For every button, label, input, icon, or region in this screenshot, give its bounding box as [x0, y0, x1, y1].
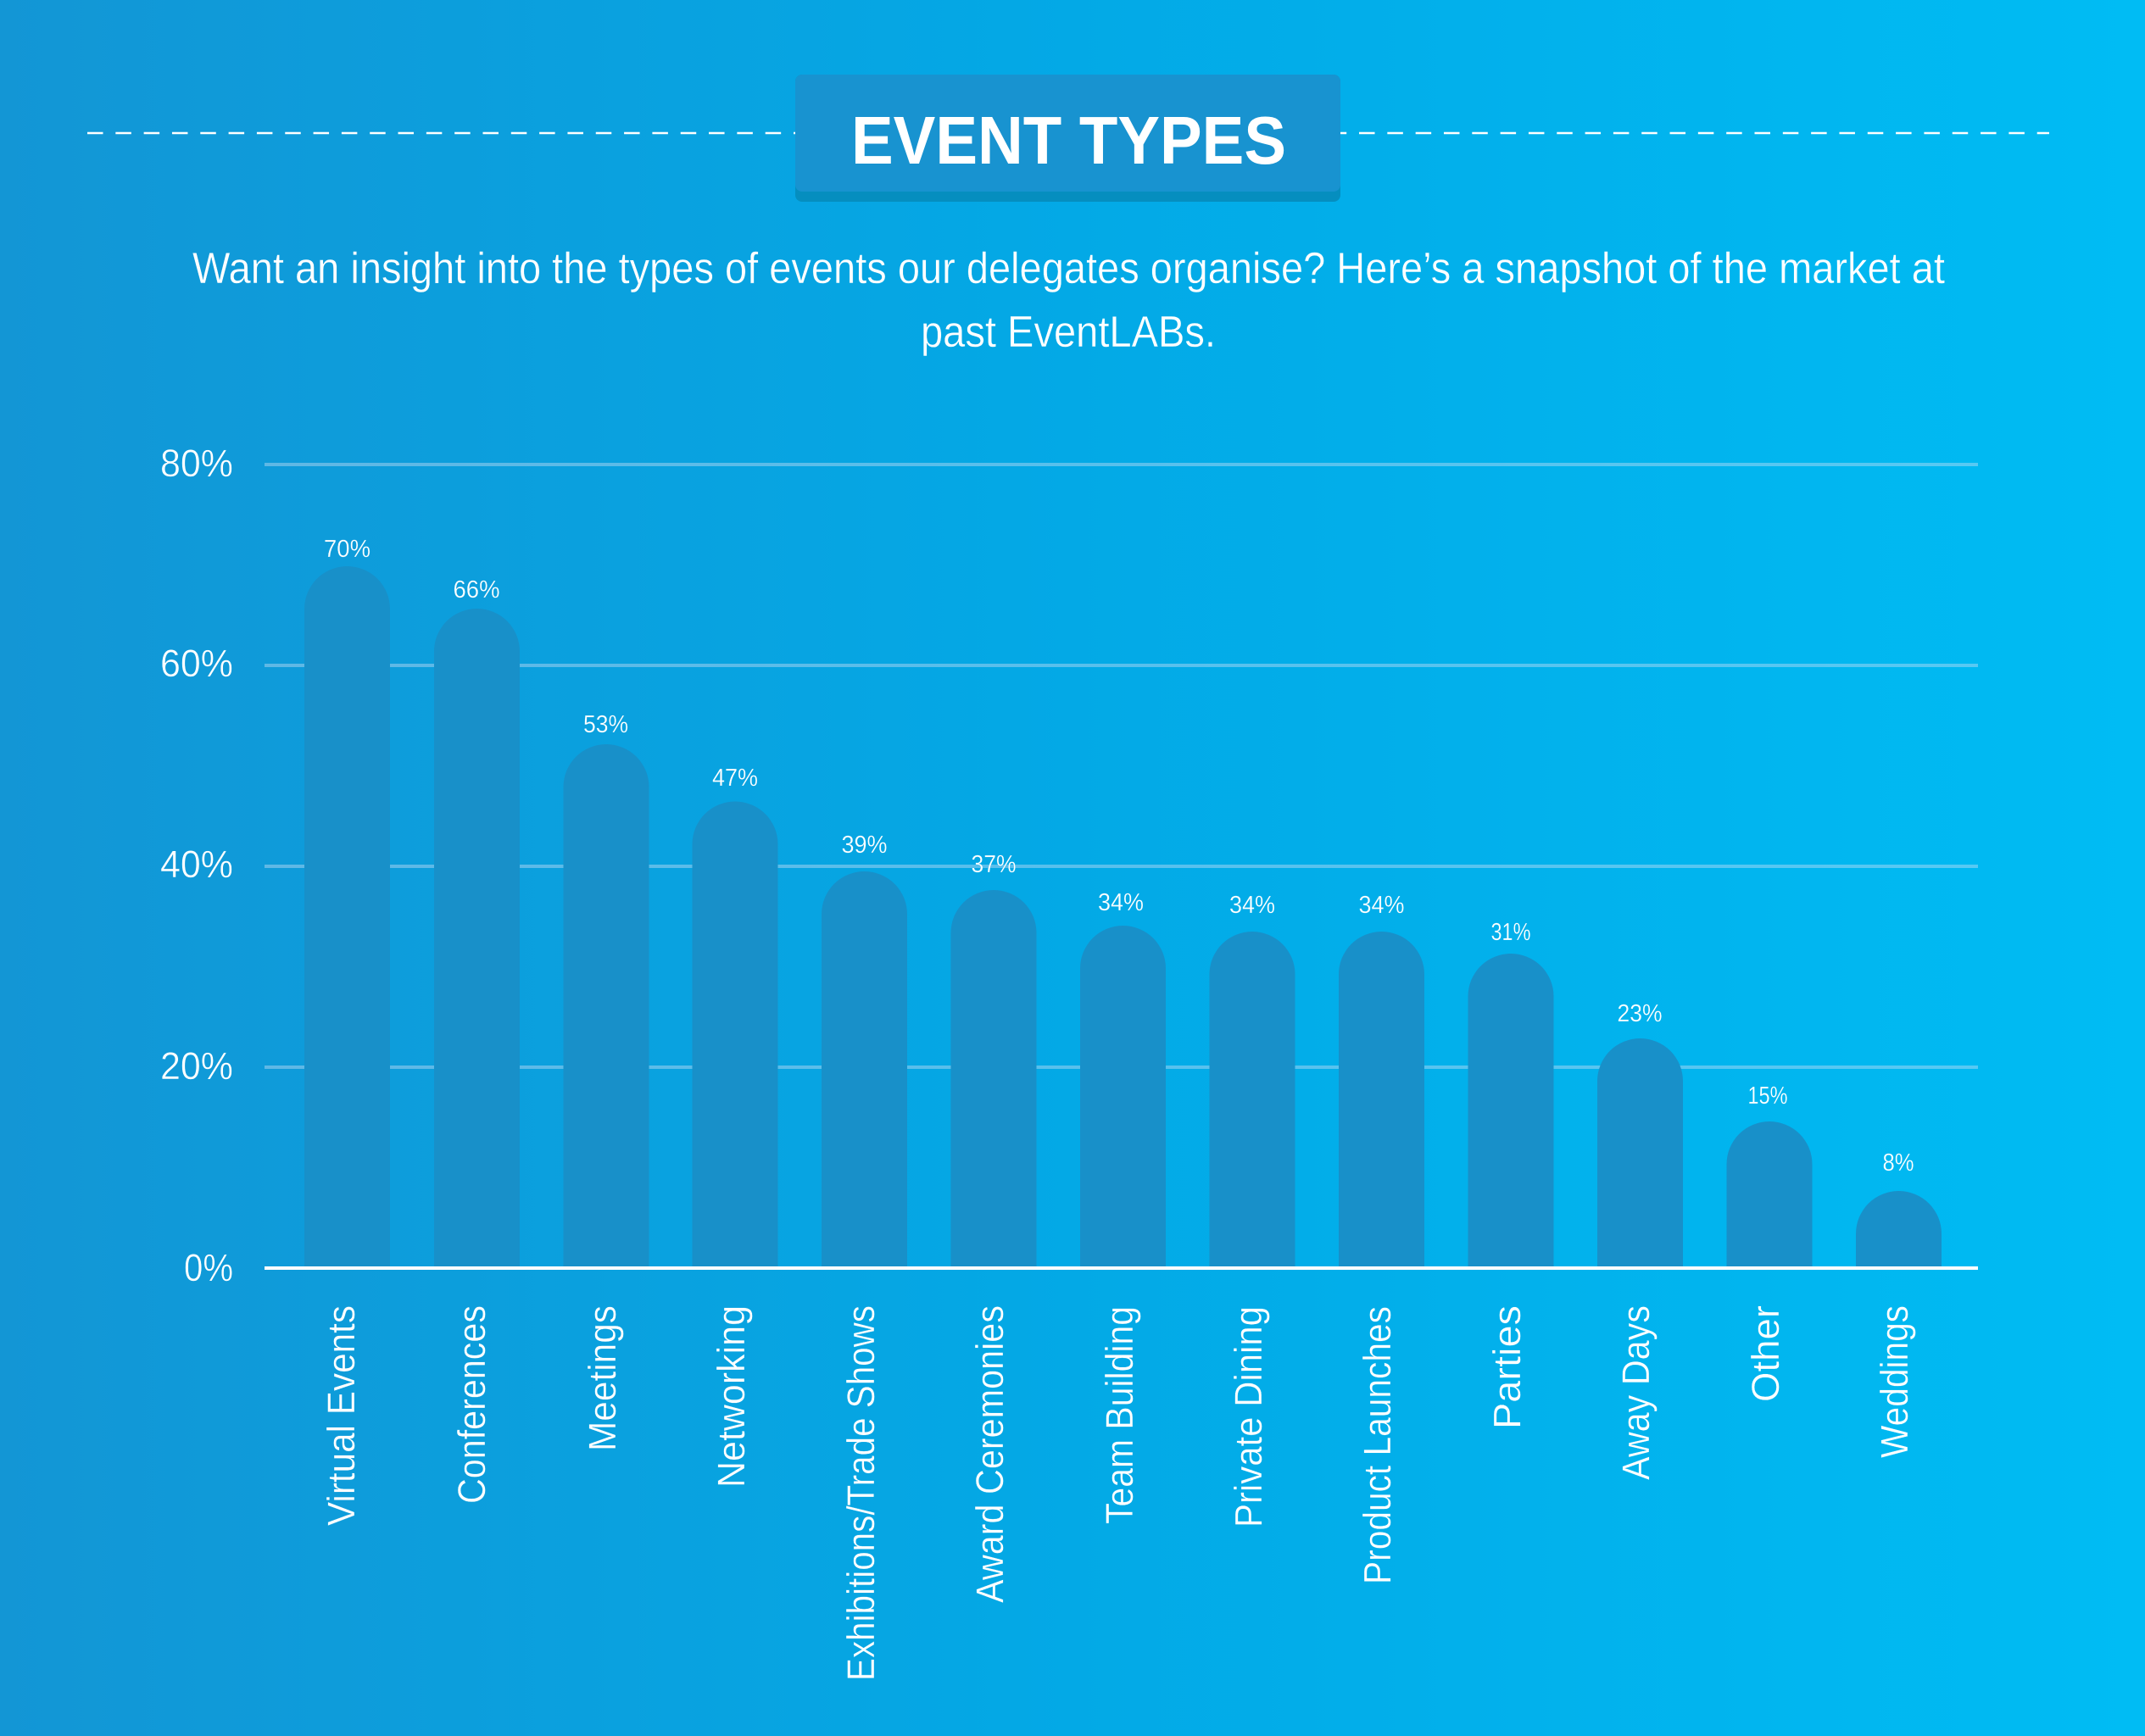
y axis labels: [160, 442, 233, 1289]
value labels: 34%: [1229, 892, 1275, 919]
category labels: Meetings: [581, 1305, 624, 1451]
value labels: 37%: [972, 851, 1016, 878]
category labels: Conferences: [450, 1305, 493, 1504]
value labels: 70%: [324, 536, 370, 563]
category labels: Award Ceremonies: [968, 1305, 1011, 1603]
category labels: Networking: [710, 1305, 753, 1488]
y axis labels: 20%: [160, 1044, 233, 1088]
category labels: Virtual Events: [320, 1305, 363, 1526]
category labels: Away Days: [1614, 1305, 1658, 1480]
intro text: Want an insight into the types of events our delegates organise? Here’s a snapshot of the market at: [192, 244, 1945, 293]
value labels: 53%: [583, 711, 628, 738]
value labels: 66%: [453, 576, 500, 604]
y axis labels: 80%: [160, 442, 233, 485]
category labels: Exhibitions/Trade Shows: [839, 1305, 883, 1681]
category labels: Product Launches: [1356, 1306, 1399, 1584]
category labels: Private Dining: [1227, 1306, 1270, 1527]
y axis labels: 60%: [160, 642, 233, 685]
value labels: 23%: [1618, 1000, 1662, 1027]
category labels: Parties: [1485, 1305, 1529, 1429]
value labels: 39%: [841, 832, 887, 859]
category labels: [320, 1305, 1916, 1681]
bar chart: [160, 442, 1978, 1681]
title: EVENT TYPES: [851, 103, 1286, 178]
bars: [304, 566, 1942, 1266]
value labels: 15%: [1748, 1082, 1787, 1110]
value labels: 31%: [1490, 919, 1531, 946]
value labels: 34%: [1098, 889, 1144, 916]
category labels: Other: [1744, 1305, 1787, 1402]
value labels: [324, 536, 1914, 1177]
intro text: [192, 244, 1945, 357]
value labels: 47%: [712, 765, 758, 792]
category labels: Team Building: [1098, 1306, 1141, 1524]
y axis labels: 40%: [160, 843, 233, 886]
value labels: 34%: [1358, 892, 1404, 919]
heading banner: [795, 75, 1340, 202]
category labels: Weddings: [1873, 1305, 1916, 1458]
y axis labels: 0%: [184, 1246, 233, 1289]
intro text: past EventLABs.: [921, 308, 1216, 357]
value labels: 8%: [1882, 1149, 1914, 1177]
